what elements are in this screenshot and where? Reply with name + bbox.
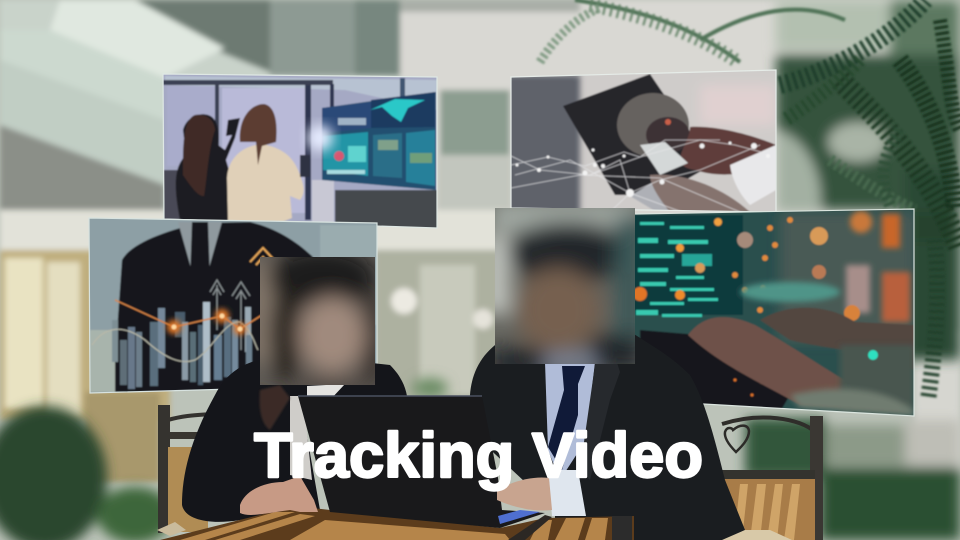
- orange bokeh lights: [633, 211, 910, 322]
- bar chart: [112, 302, 252, 389]
- blurred face: woman: [260, 257, 375, 385]
- laptop: [298, 396, 545, 528]
- dark tablet: [563, 74, 700, 196]
- man's cuff: [548, 470, 586, 516]
- code text stripes: [636, 222, 718, 317]
- palm fronds: [540, 0, 960, 400]
- man in dark suit: [470, 318, 745, 540]
- wicker garden chairs: [158, 405, 823, 540]
- woman's hands: [240, 476, 318, 515]
- blurred face: man: [495, 208, 635, 364]
- window frames: [163, 78, 405, 224]
- network lines and nodes: [511, 140, 776, 215]
- wooden table: [157, 506, 792, 540]
- right chair: [720, 416, 823, 540]
- globe: [617, 93, 689, 157]
- man's hand on keyboard: [497, 478, 552, 511]
- panel: stock chart with suit silhouette: [85, 215, 380, 395]
- title: Tracking Video: [254, 421, 703, 491]
- two women: [176, 104, 310, 222]
- glowing nodes: [167, 309, 246, 335]
- panel: whiteboard meeting with data dashboard: [160, 70, 440, 230]
- woman in black jacket: [182, 360, 407, 522]
- panel: tablet with globe and network: [505, 68, 780, 215]
- keyboard: [640, 330, 790, 412]
- dark suit silhouette: [115, 222, 313, 392]
- trend lines: [115, 300, 262, 329]
- left chair: [158, 405, 212, 533]
- dashboard screen: [322, 92, 436, 190]
- up arrows: [210, 280, 250, 350]
- hands: [688, 308, 914, 416]
- hands and phone: [680, 127, 776, 175]
- panel: coding screen and typing hands: [630, 205, 920, 420]
